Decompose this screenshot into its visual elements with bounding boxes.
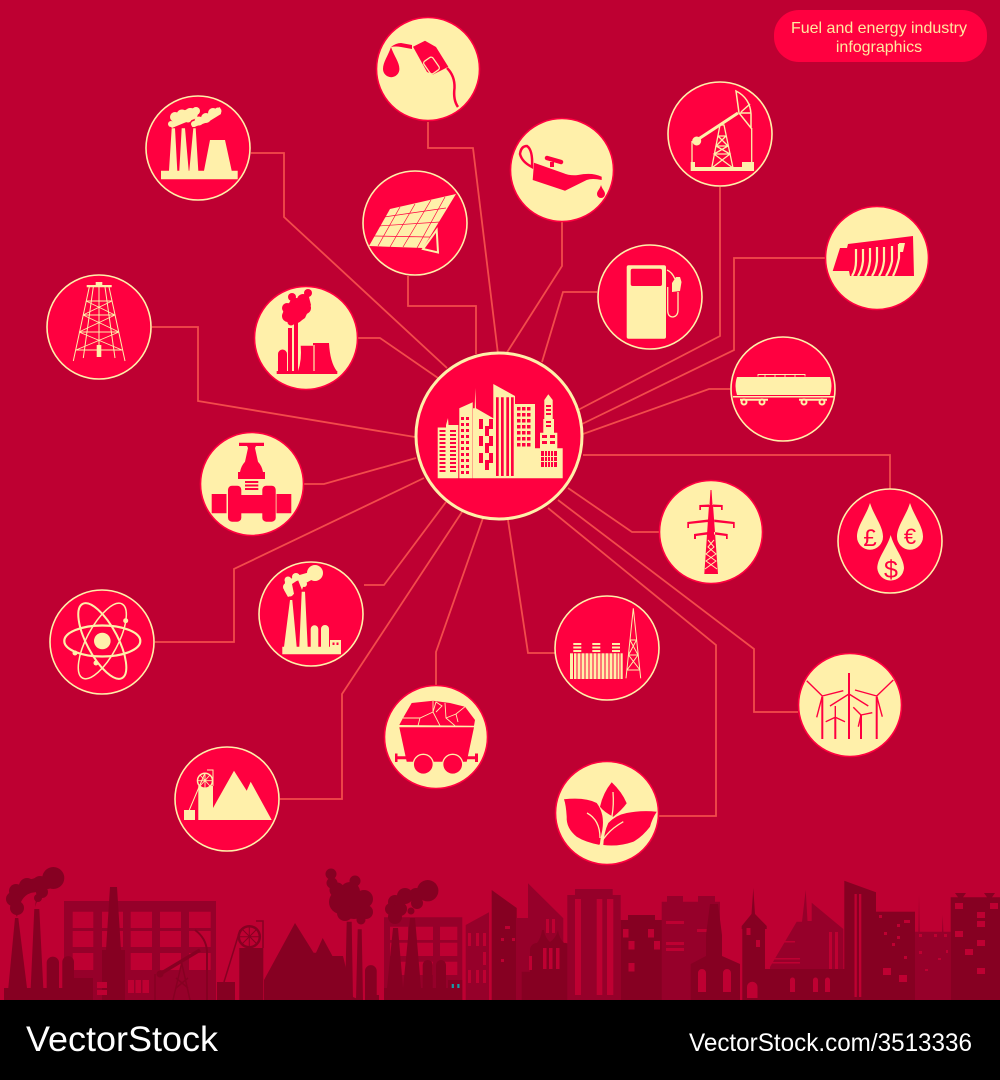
- title pill: infographics: [836, 39, 922, 56]
- connector: mine: [280, 512, 462, 799]
- skyline: second factory: [384, 880, 462, 1000]
- icon: hydro dam: [826, 206, 928, 310]
- icon: substation: [555, 596, 659, 700]
- icon: pumpjack: [668, 82, 772, 186]
- icon: transmission pylon: [660, 480, 762, 584]
- skyline silhouette: [4, 867, 1000, 1000]
- icon: pipeline valve: [200, 432, 304, 536]
- icon: currency oil drops: €: [904, 524, 916, 549]
- connector: substation: [508, 520, 555, 653]
- connector: derrick: [152, 327, 415, 437]
- icon: tank wagon: [731, 337, 835, 441]
- icon: wind turbines: [798, 654, 902, 756]
- connector: solar panel: [408, 276, 476, 354]
- icon: currency oil drops: £: [863, 525, 877, 552]
- connector: oil can: [506, 222, 562, 354]
- connector: leaves: [548, 508, 716, 816]
- icon: mine and mountains: [175, 747, 279, 851]
- icon: factory with silos: [259, 562, 363, 666]
- connector: valve: [304, 458, 416, 484]
- connector: atom: [155, 478, 424, 642]
- icon: central city: [416, 353, 582, 519]
- skyline: mine and mountains: [217, 921, 379, 1000]
- footer bar: VectorStock.com/3513336: [689, 1029, 972, 1057]
- connector: factory: [364, 502, 446, 585]
- icon: factory with cooling tower: [146, 96, 250, 200]
- icon: currency oil drops: $: [884, 556, 898, 584]
- skyline: right city: [466, 881, 1000, 1000]
- connector lines: [152, 122, 890, 816]
- icon: leaves: [556, 762, 658, 864]
- icon: fuel nozzle: [376, 18, 480, 120]
- icon: gas pump: [598, 245, 702, 349]
- title pill: Fuel and energy industry: [791, 20, 967, 37]
- skyline: pumpjack: [155, 930, 207, 1000]
- connector: pylon: [568, 488, 659, 532]
- icon: currency oil drops: [838, 489, 942, 593]
- footer bar: [0, 1000, 1000, 1080]
- skyline: left factories: [4, 867, 462, 1000]
- icon: oil can: [510, 118, 614, 222]
- connector: fuel nozzle: [428, 122, 498, 354]
- skyline: smoke plume: [326, 868, 373, 924]
- connector: gas pump: [542, 292, 597, 362]
- connector: thermal plant: [251, 153, 447, 368]
- connector: tank wagon: [583, 389, 730, 434]
- icon: coal cart: [384, 686, 488, 788]
- icon: atom: [50, 590, 154, 694]
- connector: wind turbines: [558, 500, 798, 712]
- icon: oil derrick: [47, 275, 151, 379]
- connector: coal cart: [436, 518, 483, 685]
- connector: dam: [582, 258, 825, 424]
- footer bar: VectorStock: [26, 1020, 219, 1059]
- icon: solar panel: [363, 171, 467, 275]
- connector: cooling towers: [358, 338, 438, 378]
- connector: pumpjack: [578, 187, 720, 410]
- icon: cooling towers and smoke: [254, 286, 358, 390]
- connector: currency drops: [583, 455, 890, 489]
- title pill: [774, 10, 987, 62]
